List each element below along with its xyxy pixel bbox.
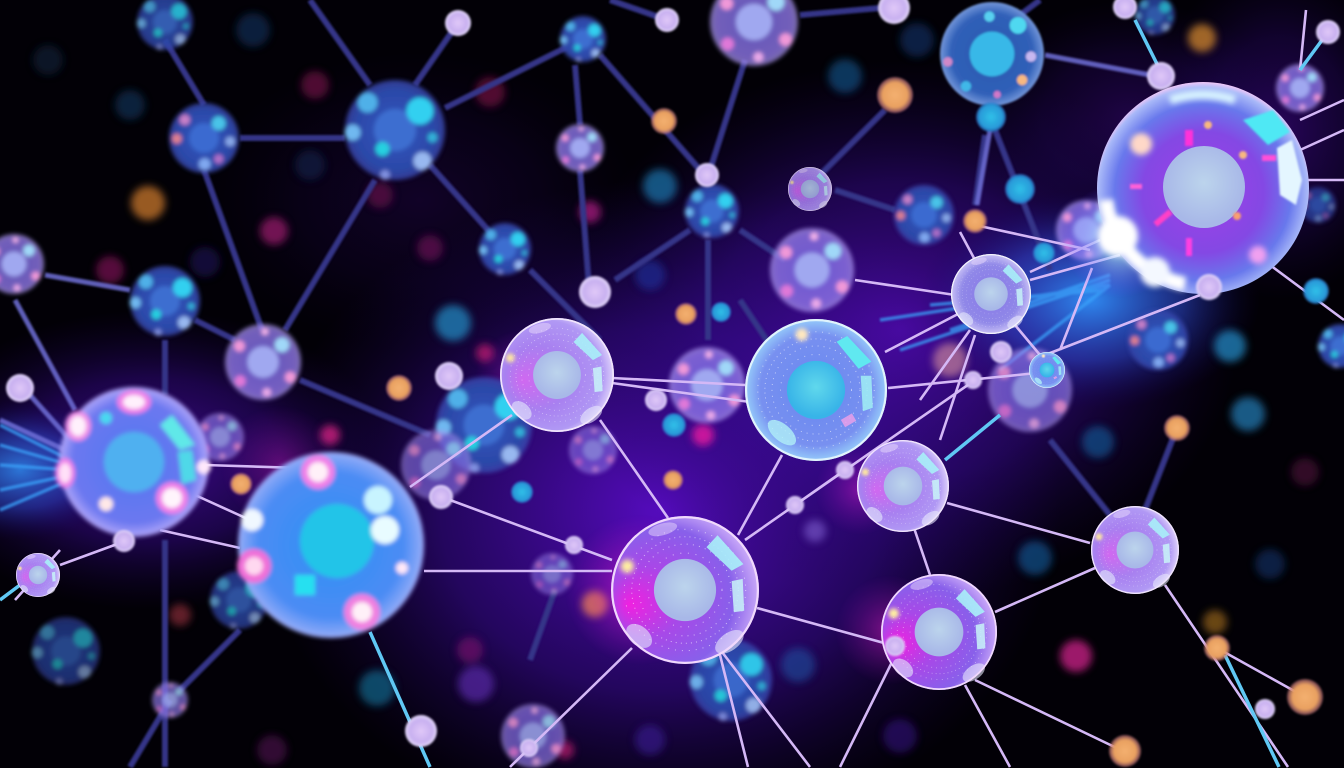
large sphere: left cluster (55, 387, 211, 537)
blue light streak fans (0, 275, 1110, 510)
medium sphere: centre left (500, 318, 614, 432)
cyan nodes (511, 102, 1329, 503)
large sphere: top right (1062, 82, 1309, 298)
medium sphere: lower right (881, 574, 997, 690)
medium sphere: magenta centre (611, 516, 759, 664)
orange nodes (230, 77, 1323, 767)
lighter lavender connections on the left (0, 55, 1150, 450)
medium sphere: centre cyan (745, 319, 887, 461)
small spheres (16, 167, 1179, 597)
background connections (130, 0, 1177, 767)
medium sphere: top right (940, 2, 1044, 106)
large sphere: cyan core (237, 452, 424, 638)
magenta glows behind spheres (220, 330, 945, 685)
